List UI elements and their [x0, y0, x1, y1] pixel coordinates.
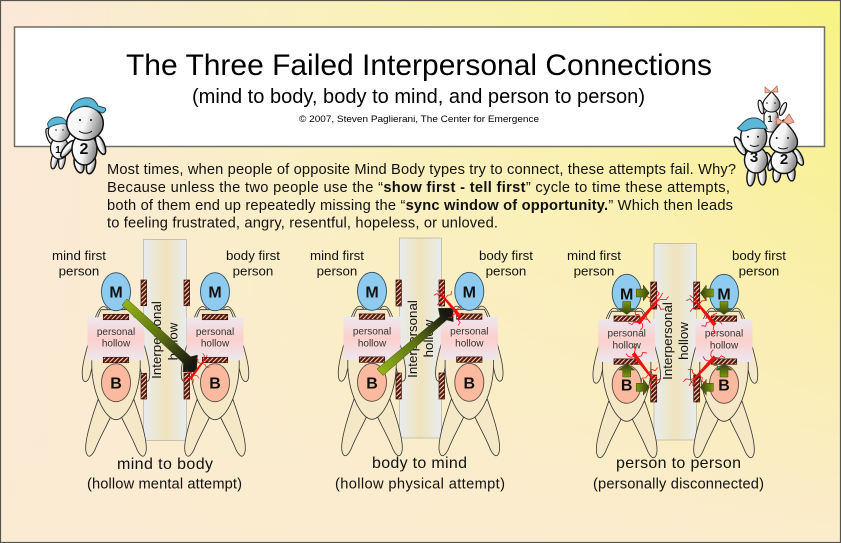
- panel: mind to body: [52, 240, 280, 492]
- caption: (hollow physical attempt): [335, 476, 505, 492]
- subtitle: (mind to body, body to mind, and person to person): [192, 86, 645, 108]
- caption: [87, 456, 242, 492]
- crack: failed connection: [181, 350, 215, 388]
- right person: body first: [181, 273, 249, 456]
- label: body first person: body first: [226, 248, 280, 263]
- label: body first person: body first: [732, 248, 786, 263]
- caption: [335, 455, 505, 492]
- caption: (personally disconnected): [593, 476, 764, 492]
- label: mind first person: person: [59, 264, 99, 279]
- right person: body first: personal: [196, 327, 234, 338]
- right person: body first: B: [464, 375, 475, 392]
- label: mind first person: [52, 248, 106, 279]
- small arrows: [619, 285, 732, 395]
- interpersonal hollow label: hollow: [421, 319, 436, 357]
- intro text block: Because unless the two people use the “show first - tell first” cycle to time these attempts,: [107, 180, 730, 196]
- label: mind first person: mind first: [310, 248, 364, 263]
- icon: cartoon figures 1 and 2: 2: [80, 141, 89, 158]
- interpersonal hollow label: [660, 302, 691, 380]
- icon: cartoon figures 1 and 2: 1: [55, 145, 61, 156]
- right person: body first: [690, 274, 758, 458]
- right person: body first: M: [463, 284, 476, 301]
- caption: mind to body: [117, 456, 213, 473]
- icon: cartoon figures 1, 3 and 2: 1: [767, 114, 773, 124]
- right person: body first: B: [209, 376, 221, 393]
- right person: body first: M: [208, 285, 222, 302]
- left person: mind first: personal: [353, 327, 391, 338]
- label: mind first person: person: [317, 264, 357, 279]
- caption: body to mind: [372, 455, 467, 472]
- panel: person to person: [567, 244, 786, 492]
- interpersonal hollow label: Interpersonal: [405, 300, 420, 378]
- interpersonal hollow column: [144, 240, 186, 440]
- interpersonal hollow label: Interpersonal: [660, 302, 675, 380]
- right person: body first: personal: [450, 327, 488, 338]
- interpersonal hollow label: [149, 301, 180, 379]
- interpersonal hollow label: hollow: [676, 322, 691, 360]
- cracks: failed connections: [621, 286, 727, 393]
- caption: [593, 455, 764, 492]
- interpersonal hollow label: [405, 300, 436, 378]
- left person: mind first: personal: [608, 329, 646, 340]
- left person: mind first: hollow: [358, 338, 387, 349]
- label: body first person: person: [486, 264, 526, 279]
- caption: person to person: [616, 455, 741, 472]
- title: The Three Failed Interpersonal Connections: [126, 49, 712, 82]
- label: body first person: person: [739, 264, 779, 279]
- label: mind first person: [310, 248, 364, 279]
- label: mind first person: [567, 248, 621, 279]
- caption: (hollow mental attempt): [87, 476, 242, 492]
- left person: mind first: personal: [97, 327, 135, 338]
- right person: body first: hollow: [710, 340, 739, 351]
- interpersonal hollow label: Interpersonal: [149, 301, 164, 379]
- boundary bars: [141, 280, 190, 399]
- left person: mind first: hollow: [102, 339, 131, 350]
- label: body first person: person: [233, 264, 273, 279]
- intro text block: to feeling frustrated, angry, resentful, hopeless, or unloved.: [107, 216, 498, 232]
- label: body first person: [732, 248, 786, 279]
- left person: mind first: [338, 272, 406, 456]
- right person: body first: M: [717, 286, 731, 303]
- left person: mind first: [82, 273, 150, 456]
- intro text block: both of them end up repeatedly missing the “sync window of opportunity.” Which then leads: [107, 198, 733, 214]
- icon: cartoon figures 1, 3 and 2: 3: [750, 149, 758, 166]
- right person: body first: personal: [705, 329, 743, 340]
- title panel: [14, 27, 824, 146]
- left person: mind first: B: [621, 377, 632, 394]
- label: body first person: [479, 248, 533, 279]
- boundary bars: [651, 282, 700, 402]
- right person: body first: [436, 272, 503, 456]
- icon: cartoon figures 1, 3 and 2: [732, 86, 806, 186]
- copyright: © 2007, Steven Paglierani, The Center for Emergence: [299, 114, 539, 125]
- left person: mind first: [593, 274, 660, 458]
- intro text block: [107, 162, 736, 232]
- right person: body first: hollow: [201, 339, 230, 350]
- label: mind first person: person: [574, 264, 614, 279]
- label: body first person: body first: [479, 248, 533, 263]
- icon: cartoon figures 1, 3 and 2: 2: [780, 151, 788, 168]
- arrow: mind reaches toward body: [122, 299, 198, 372]
- label: mind first person: mind first: [567, 248, 621, 263]
- left person: mind first: M: [620, 286, 633, 303]
- right person: body first: hollow: [455, 338, 484, 349]
- panel: body to mind: [310, 238, 533, 492]
- left person: mind first: M: [109, 285, 123, 302]
- label: mind first person: mind first: [52, 248, 106, 263]
- left person: mind first: hollow: [613, 340, 642, 351]
- label: body first person: [226, 248, 280, 279]
- icon: cartoon figures 1 and 2: [44, 98, 108, 175]
- interpersonal hollow column: [654, 244, 696, 440]
- boundary bars: [396, 280, 445, 399]
- crack: failed connection: [429, 283, 471, 327]
- interpersonal hollow label: hollow: [166, 322, 180, 360]
- intro text block: Most times, when people of opposite Mind Body types try to connect, these attempts fail. Why?: [107, 162, 736, 178]
- right person: body first: B: [718, 377, 730, 394]
- left person: mind first: M: [365, 284, 379, 301]
- arrow: body reaches toward mind: [377, 308, 453, 376]
- interpersonal hollow column: [399, 238, 441, 438]
- left person: mind first: B: [110, 376, 122, 393]
- left person: mind first: B: [366, 375, 378, 392]
